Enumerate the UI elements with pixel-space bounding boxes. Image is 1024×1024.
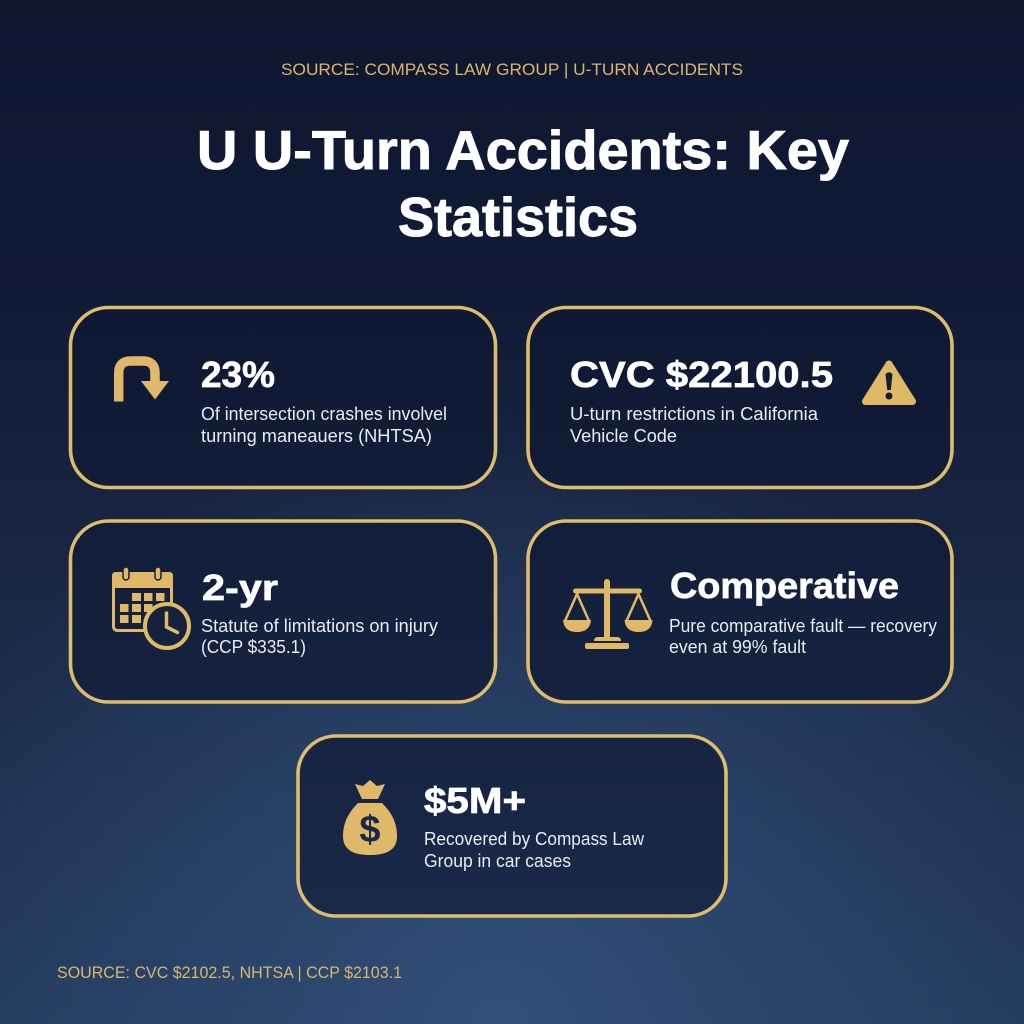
description: statute of limitations: (CCP $335.1): [201, 636, 306, 657]
icon: u-turn arrow: [119, 361, 169, 402]
title: U U-Turn Accidents: Key: [197, 119, 849, 181]
panel: CVC section: [528, 308, 952, 488]
stat: $5M+: $5M+: [424, 780, 526, 821]
description: U-turn restrictions: Vehicle Code: [570, 425, 677, 446]
description: pure comparative fault: even at 99% fault: [669, 636, 806, 657]
description: pure comparative fault: [669, 615, 938, 657]
title: Statistics: [398, 186, 638, 248]
stat: CVC $22100.5: CVC $22100.5: [570, 354, 833, 395]
source line bottom: SOURCE: CVC $2102.5, NHTSA | CCP $2103.1: [57, 963, 402, 982]
icon: money bag: $: [359, 809, 381, 851]
panel: 23% turning maneuvers: [70, 308, 496, 488]
icon: money bag: [343, 780, 397, 855]
description: statute of limitations: [201, 615, 439, 657]
title: [197, 119, 849, 248]
description: intersection crashes: Of intersection crashes involvel: [201, 403, 447, 424]
description: recovered by Compass Law Group: Recovered by Compass Law: [424, 828, 645, 849]
description: intersection crashes: [201, 403, 447, 446]
description: U-turn restrictions: U-turn restrictions in California: [570, 403, 819, 424]
description: U-turn restrictions: [570, 403, 819, 446]
source line top: SOURCE: COMPASS LAW GROUP | U-TURN ACCIDENTS: [281, 60, 743, 79]
icon: scales of justice: [563, 579, 652, 649]
stat: 23%: 23%: [201, 354, 275, 395]
stat: Comperative: Comperative: [670, 565, 899, 606]
panel: 2-yr statute: [70, 521, 496, 702]
description: intersection crashes: turning maneauers (NHTSA): [201, 425, 432, 446]
panel: $5M+ recovered: [298, 736, 726, 916]
icon: calendar and clock: [112, 567, 189, 648]
description: statute of limitations: Statute of limitations on injury: [201, 615, 439, 636]
description: recovered by Compass Law Group: [424, 828, 645, 871]
panel: comparative fault: [528, 521, 952, 702]
stat: 2-yr: 2-yr: [202, 567, 278, 608]
icon: warning triangle: [866, 364, 912, 402]
description: recovered by Compass Law Group: Group in car cases: [424, 850, 571, 871]
description: pure comparative fault: Pure comparative fault — recovery: [669, 615, 938, 636]
